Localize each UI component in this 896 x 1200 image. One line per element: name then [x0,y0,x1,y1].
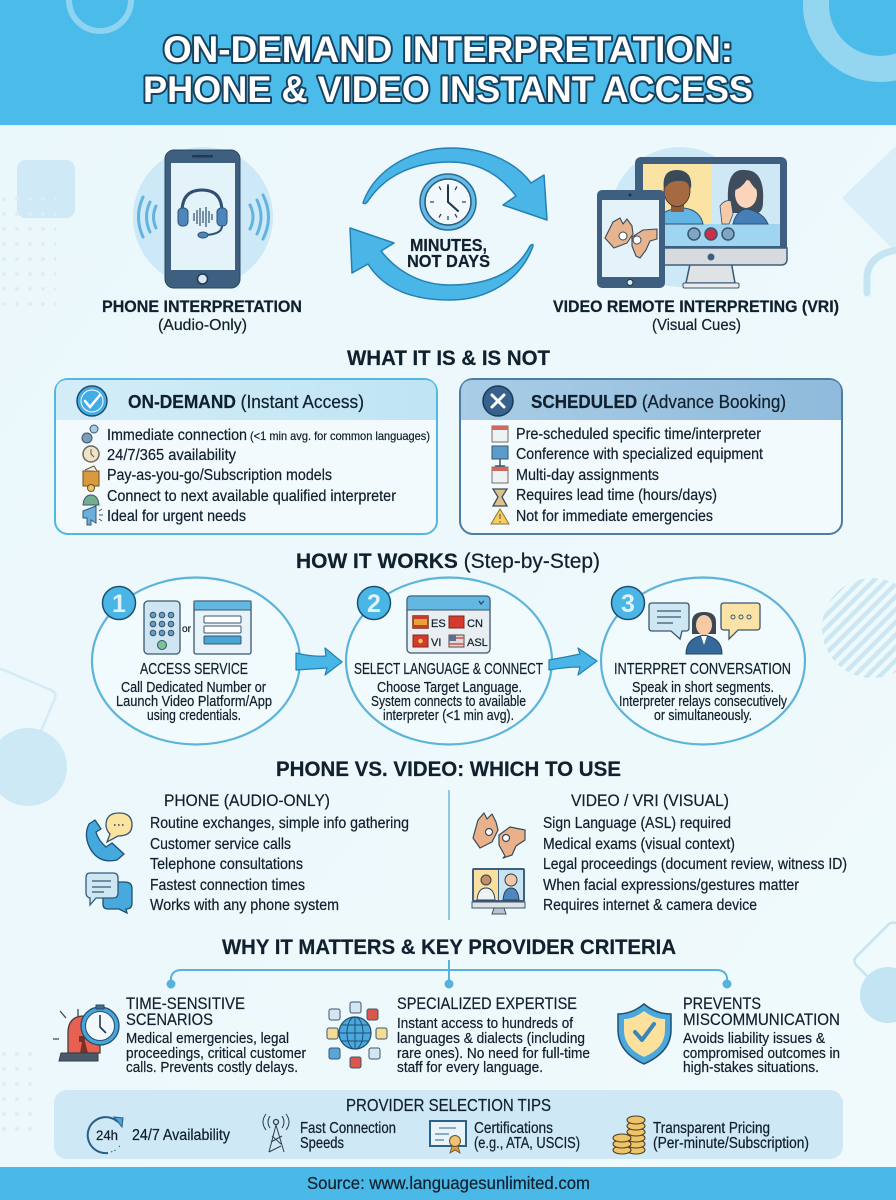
list: phone: Customer service calls [150,836,291,853]
panel: provider selection tips [54,1090,843,1159]
title: ON-DEMAND INTERPRETATION: [163,29,733,70]
list: video: When facial expressions/gestures matter [543,877,799,894]
list: video: Medical exams (visual context) [543,836,735,853]
badge 2: 2 [367,590,381,618]
text: languages & dialects (including [397,1030,585,1047]
icon: keypad [144,601,180,654]
text: TIME-SENSITIVE [126,994,245,1013]
list: video: Legal proceedings (document review, witness ID) [543,856,847,873]
list: video: Sign Language (ASL) required [543,815,731,832]
text [683,994,840,1076]
text: or: or [182,623,191,635]
arrow: top [363,148,547,220]
icon: video monitor and tablet [597,147,787,288]
arrow: bottom [350,228,533,300]
arrow: step 1 to 2 [296,648,342,675]
list: on-demand: 24/7/365 availability [107,447,236,464]
tip: speed: Speeds [300,1135,344,1152]
text: step 1: using credentials. [147,708,241,724]
text: high-stakes situations. [683,1059,819,1076]
icons: scheduled rows [491,426,509,524]
list: video: Requires internet & camera device [543,897,757,914]
panel: scheduled [460,379,842,534]
label: VRI: (Visual Cues) [652,317,741,334]
icon: signing hands [605,218,657,258]
text: rare ones). No need for full-time [397,1045,590,1062]
text: step 3: Speak in short segments. [632,680,774,696]
icon: cross [483,386,513,416]
list: scheduled: Not for immediate emergencies [516,508,713,525]
text: step 2: SELECT LANGUAGE & CONNECT [354,661,543,678]
heading: phone: PHONE (AUDIO-ONLY) [164,791,330,810]
icon: monitor with doctor and interpreter [472,868,525,914]
text: MISCOMMUNICATION [683,1010,840,1029]
step 1 [92,578,300,744]
tip: pricing: (Per-minute/Subscription) [653,1135,809,1152]
text: compromised outcomes in [683,1045,840,1062]
panel: on-demand [55,379,437,534]
list: phone [150,815,409,914]
footer [0,1167,896,1200]
text: Instant access to hundreds of [397,1015,574,1032]
text: step 2: System connects to available [371,694,526,710]
heading: why it matters: WHY IT MATTERS & KEY PROVIDER CRITERIA [222,935,676,959]
icon: siren and stopwatch [53,1005,119,1061]
list: on-demand: Pay-as-you-go/Subscription models [107,467,332,484]
heading: how it works: HOW IT WORKS (Step-by-Step) [296,549,600,573]
text: step 2: Choose Target Language. [377,680,522,696]
column: video [472,791,847,914]
badge 2 [358,586,390,620]
icon: language window: CN [467,618,483,630]
footer: Source: www.languagesunlimited.com [307,1173,590,1193]
list: scheduled: Pre-scheduled specific time/interpreter [516,426,761,443]
list: on-demand: Immediate connection [107,427,247,444]
criterion: prevents miscommunication [618,994,840,1076]
icon: clock [420,174,476,230]
title [143,29,753,110]
text: SPECIALIZED EXPERTISE [397,994,577,1013]
list: on-demand: Ideal for urgent needs [107,508,246,525]
list: phone: Telephone consultations [150,856,303,873]
tip: availability [88,1117,230,1153]
text [126,994,306,1076]
icon: shield [618,1004,671,1064]
label: minutes not days: MINUTES, [410,235,487,255]
icon: globe with language bubbles [327,1002,387,1068]
icon: login window [194,601,251,654]
tablet [597,190,665,288]
tip: availability: 24h [96,1128,118,1143]
text: step 1: Call Dedicated Number or [121,680,266,696]
call controls [688,228,734,260]
person: man [662,170,703,224]
list: scheduled: Conference with specialized equipment [516,446,764,463]
tip: certifications [430,1120,580,1153]
cycle arrows with clock [350,148,547,300]
tip: certifications: (e.g., ATA, USCIS) [474,1135,580,1152]
list: phone: Routine exchanges, simple info gathering [150,815,409,832]
text: Avoids liability issues & [683,1030,825,1047]
text: step 3: INTERPRET CONVERSATION [614,661,791,678]
text: step 3 [614,661,791,724]
heading: scheduled: SCHEDULED (Advance Booking) [531,391,786,412]
icon: language window: VI [431,637,441,649]
heading: tips: PROVIDER SELECTION TIPS [346,1095,551,1115]
title: PHONE & VIDEO INSTANT ACCESS [143,69,753,110]
list: on-demand [107,427,430,525]
badge 3 [612,586,644,620]
badge 3: 3 [621,590,635,618]
icon: handset with bubble [86,813,132,861]
step 3 [601,578,805,744]
tip: speed [263,1114,396,1152]
arrow: step 2 to 3 [549,648,597,675]
text: step 1: ACCESS SERVICE [140,661,248,678]
label: phone interpretation: PHONE INTERPRETATION [102,298,302,316]
icons: on-demand rows [82,425,103,525]
tip: pricing: Transparent Pricing [653,1120,770,1137]
badge 1: 1 [112,590,126,618]
column: phone [86,791,409,914]
badge 1 [102,586,136,620]
text: step 2: interpreter (<1 min avg). [383,708,514,724]
list: video [543,815,847,914]
label: minutes not days: NOT DAYS [407,251,490,271]
list: scheduled: Requires lead time (hours/days) [516,487,717,504]
text: step 2 [354,661,543,724]
icon: interpreter with bubbles [649,603,760,654]
step 2 [346,578,552,744]
header banner [0,0,896,125]
icon: signing hands [473,813,525,858]
icon: language window: ASL [467,637,488,649]
label: phone interpretation [102,298,302,334]
heading: video: VIDEO / VRI (VISUAL) [571,791,729,810]
text: SCENARIOS [126,1010,213,1029]
heading: what it is: WHAT IT IS & IS NOT [347,346,550,370]
icon: check [77,386,107,416]
text: proceedings, critical customer [126,1045,306,1062]
text [397,994,590,1076]
icon: language window: ES [431,618,446,630]
label: minutes not days [407,235,490,271]
label: VRI [553,298,839,334]
icon: language window [407,596,490,653]
list: scheduled [516,426,764,525]
text: staff for every language. [397,1059,543,1076]
tip: pricing [613,1116,809,1154]
text: Medical emergencies, legal [126,1030,289,1047]
tip: certifications: Certifications [474,1120,553,1137]
icon: phone with headset [133,147,273,288]
person: woman [720,170,768,224]
connector [168,960,730,988]
criterion: specialized expertise [327,994,590,1076]
list: scheduled: Multi-day assignments [516,467,659,484]
text: calls. Prevents costly delays. [126,1059,298,1076]
list: on-demand: (<1 min avg. for common languages) [250,429,430,443]
list: on-demand: Connect to next available qualified interpreter [107,488,396,505]
heading: phone vs video: PHONE VS. VIDEO: WHICH TO USE [276,757,621,781]
text: step 1 [116,661,272,724]
text: step 3: Interpreter relays consecutively [619,694,788,710]
criterion: time-sensitive [53,994,306,1076]
text: step 1: Launch Video Platform/App [116,694,272,710]
label: phone interpretation: (Audio-Only) [158,317,247,334]
list: phone: Fastest connection times [150,877,305,894]
label: VRI: VIDEO REMOTE INTERPRETING (VRI) [553,298,839,316]
list: phone: Works with any phone system [150,897,339,914]
text: step 3: or simultaneously. [654,708,752,724]
tip: speed: Fast Connection [300,1120,396,1137]
icon: chat bubbles [86,873,132,913]
tip: availability: 24/7 Availability [132,1127,230,1144]
heading: on-demand: ON-DEMAND (Instant Access) [128,391,364,412]
text: PREVENTS [683,994,761,1013]
